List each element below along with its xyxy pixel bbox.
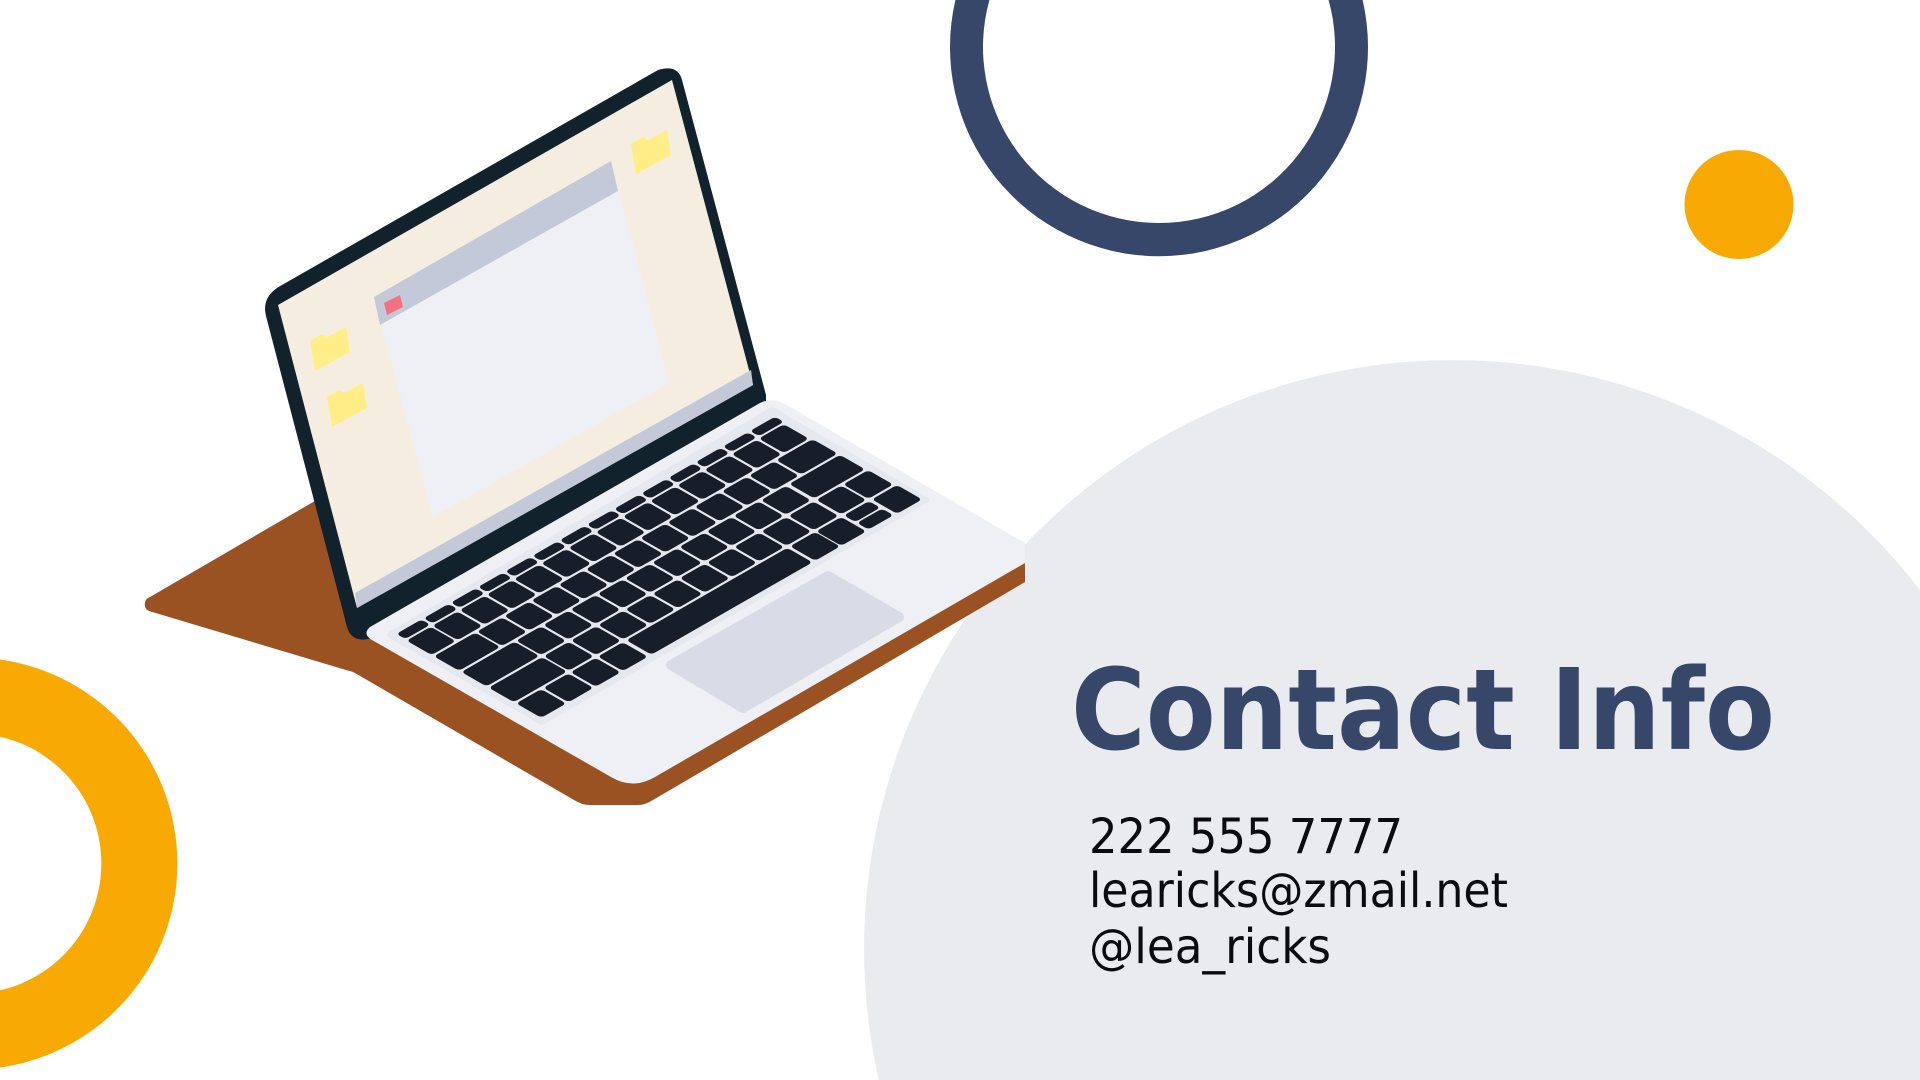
app window: [374, 161, 669, 517]
phone number: 222 555 7777: [1089, 809, 1403, 865]
keyboard tray: [390, 410, 926, 722]
screen wallpaper: [278, 80, 753, 608]
folder icon 2: [327, 383, 367, 427]
window title bar: [374, 161, 618, 325]
laptop screen: [265, 68, 766, 640]
keyboard keys: [396, 416, 922, 718]
window close button: [384, 295, 403, 315]
title: Contact Info: [1071, 646, 1775, 776]
folder icon 3: [631, 130, 671, 174]
contact details: [1089, 809, 1508, 975]
orange ring at left: [0, 660, 177, 1068]
laptop base: [366, 400, 1025, 784]
touchpad: [671, 576, 899, 708]
email address: learicks@zmail.net: [1089, 863, 1508, 919]
laptop illustration: [145, 68, 1025, 805]
social handle: @lea_ricks: [1089, 919, 1331, 975]
screen bezel: [265, 68, 766, 640]
orange dot: [1684, 150, 1794, 259]
navy ring at top: [950, 0, 1368, 256]
screen bottom strip: [355, 370, 753, 608]
folder icon 1: [310, 327, 350, 371]
large grey background circle: [864, 360, 1920, 1080]
laptop shadow and base edge: [145, 498, 1025, 805]
